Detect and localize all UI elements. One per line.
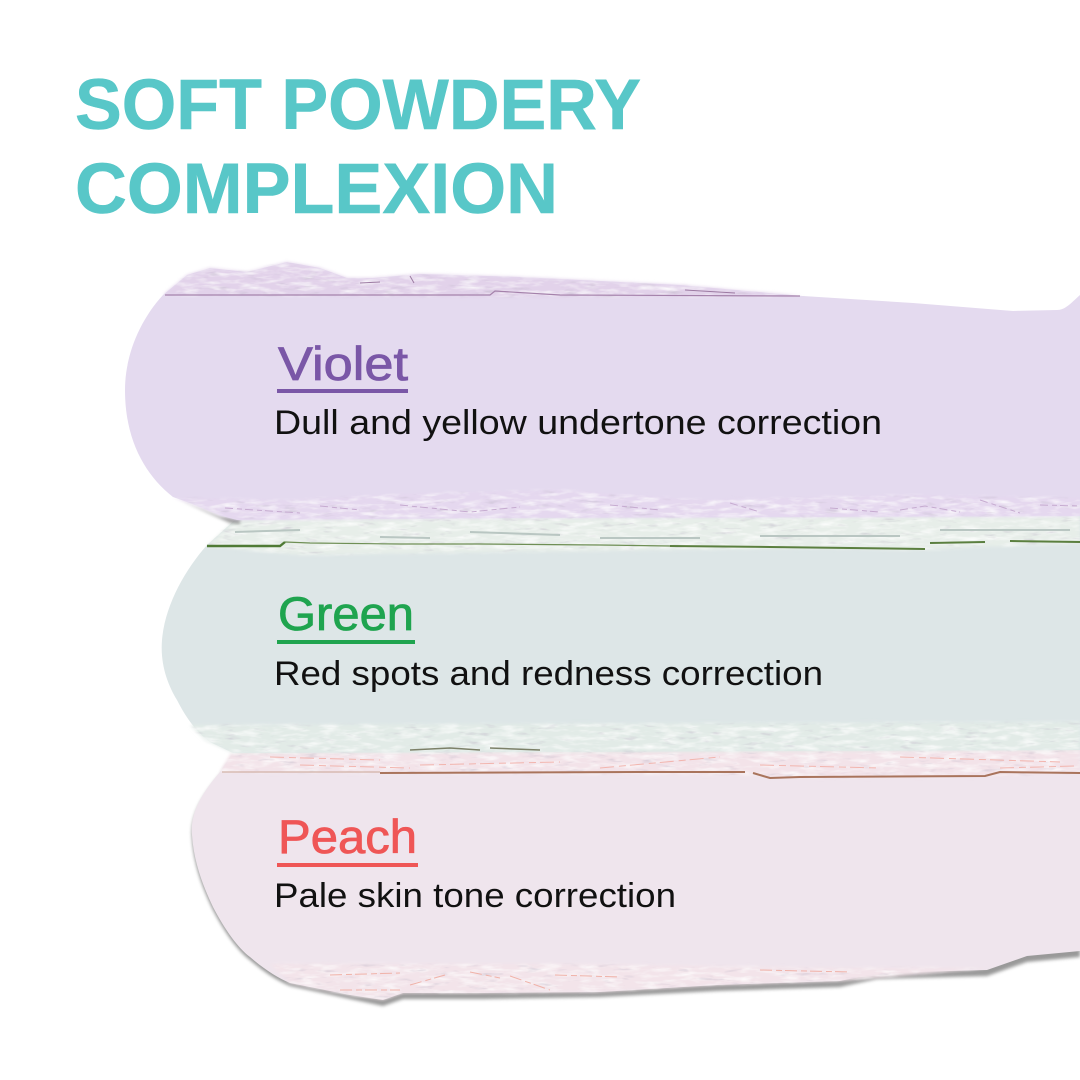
- title: SOFT POWDERY: [75, 66, 641, 145]
- panel: green swatch: [162, 510, 1080, 753]
- violet top crust: [163, 262, 803, 297]
- heading: violet: Violet: [278, 337, 408, 390]
- green bottom crust: [190, 722, 1080, 753]
- heading: peach: Peach: [278, 810, 417, 863]
- text: green description: Red spots and redness correction: [274, 655, 823, 693]
- title: [75, 66, 641, 229]
- green top crust: [207, 515, 1080, 555]
- heading: green: Green: [278, 587, 414, 640]
- panel: violet swatch: [125, 262, 1080, 524]
- peach top crust: [220, 745, 1080, 778]
- violet bottom crust: [175, 490, 1080, 520]
- title: COMPLEXION: [75, 150, 558, 229]
- text: peach description: Pale skin tone correction: [274, 877, 676, 915]
- text: violet description: Dull and yellow undertone correction: [274, 404, 882, 442]
- panel: peach swatch: [192, 745, 1080, 1006]
- peach bottom crust: [270, 964, 990, 1000]
